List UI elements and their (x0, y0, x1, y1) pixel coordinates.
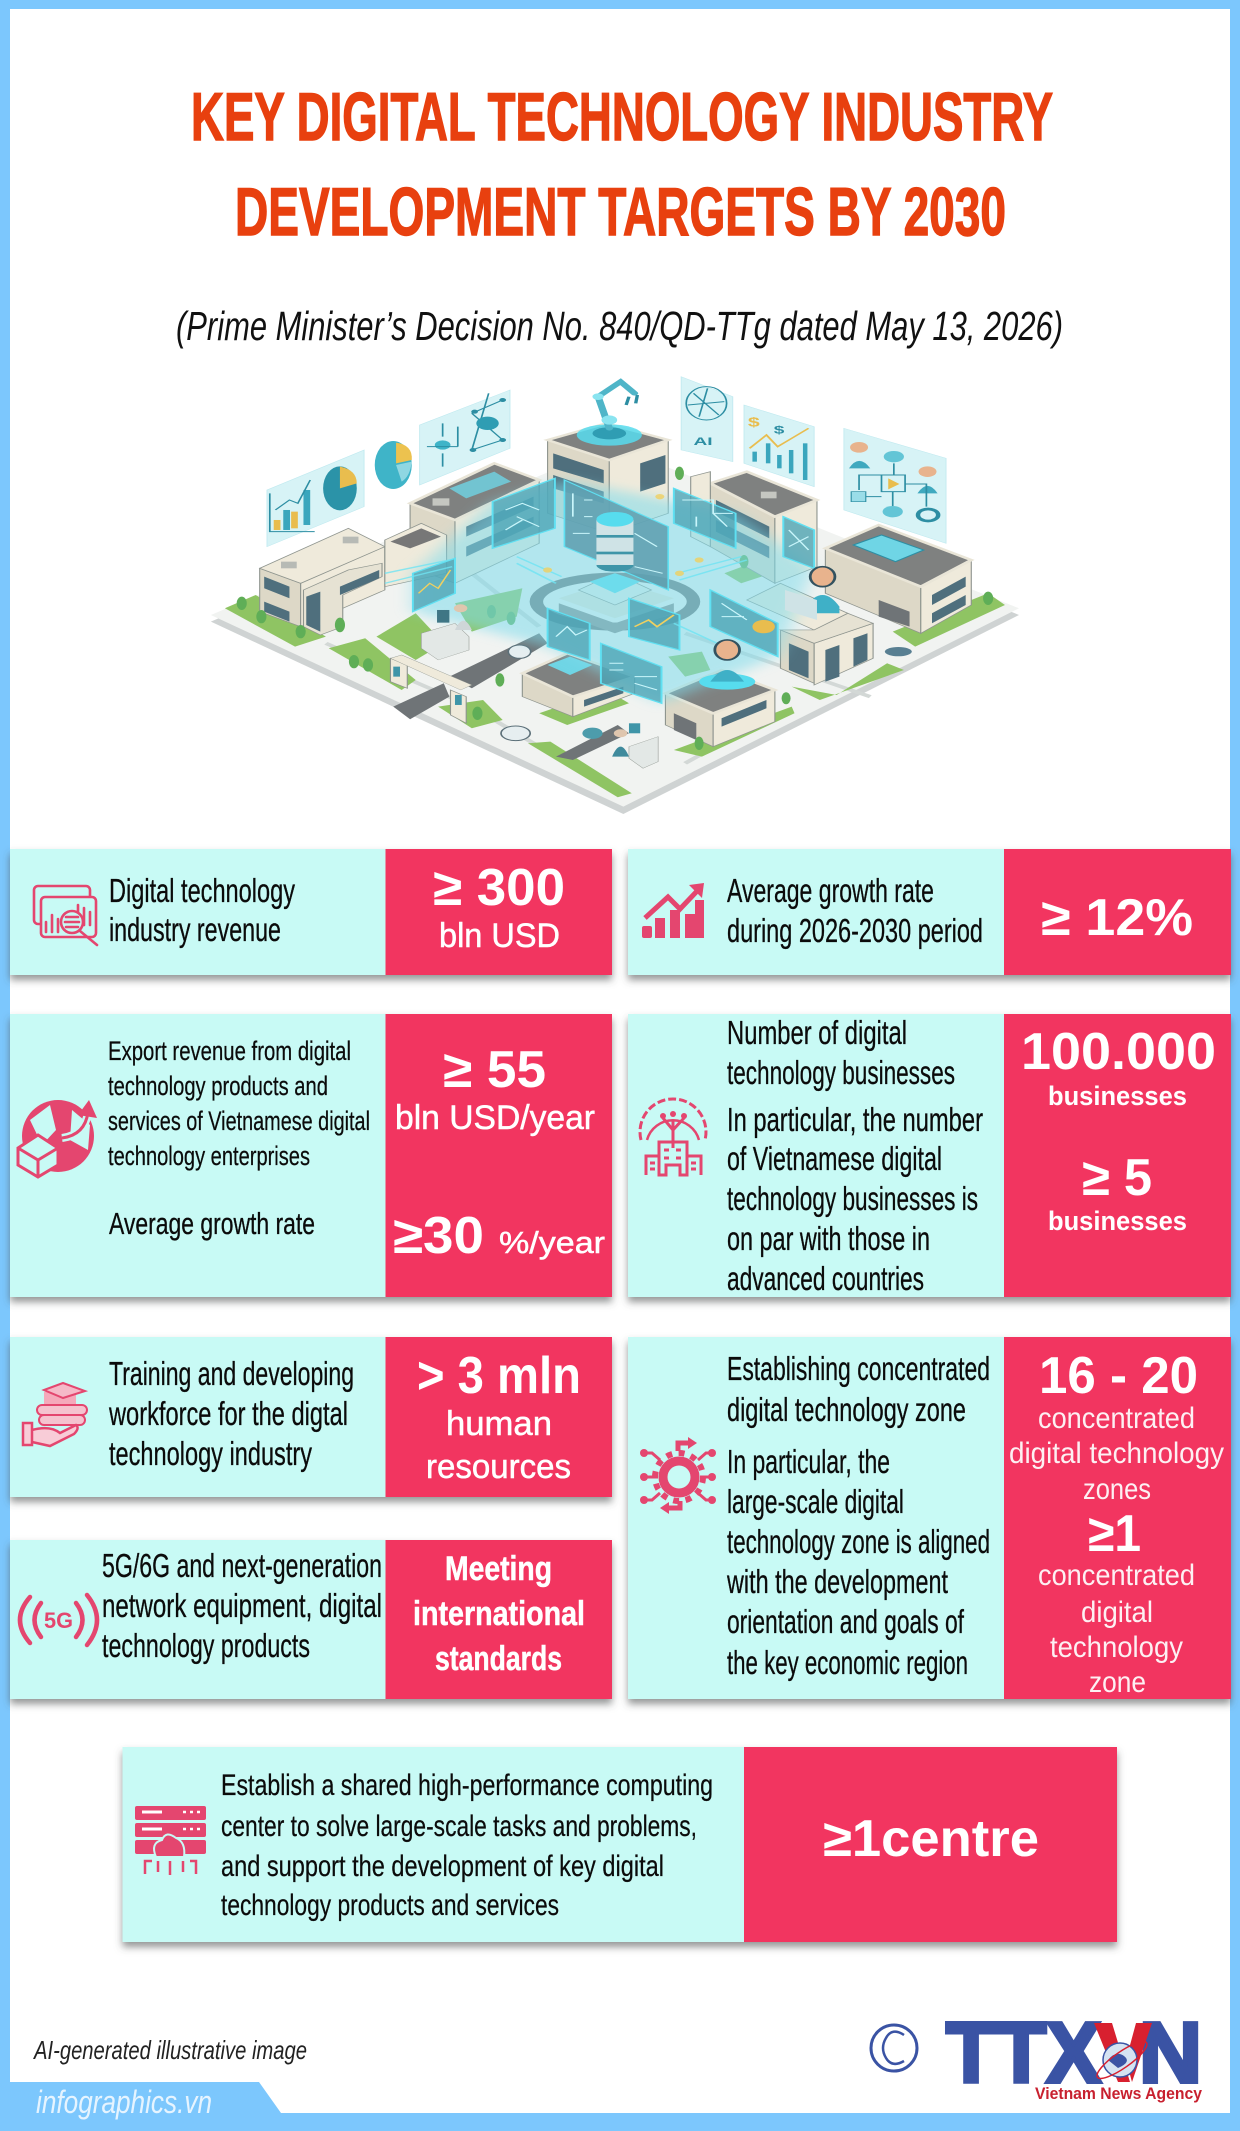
panel: concentrated digital technology zones: 16 - 20 (1039, 1347, 1198, 1405)
panel: digital technology industry revenue (10, 849, 612, 975)
building: right tall (691, 472, 817, 583)
panel: export revenue: services of Vietnamese digital (108, 1106, 370, 1136)
icon: graduation cap, books and hand (23, 1383, 87, 1446)
panel: average growth rate (628, 849, 1231, 975)
building: left (260, 528, 385, 635)
panel: concentrated digital technology zones: technology (1050, 1631, 1183, 1664)
panel: concentrated digital technology zones: zone (1089, 1666, 1146, 1699)
panel: concentrated digital technology zones (628, 1337, 1231, 1699)
panel: export revenue (10, 1014, 612, 1297)
panel: average growth rate: during 2026-2030 period (727, 912, 983, 949)
panel: number of digital technology businesses: ≥ 5 (1082, 1149, 1152, 1207)
panel: export revenue: ≥30 (393, 1207, 484, 1265)
panel: number of digital technology businesses: technology businesses is (727, 1180, 978, 1217)
logo: TTXVN Vietnam News Agency: Vietnam News Agency (1035, 2084, 1202, 2103)
panel: concentrated digital technology zones: Establishing concentrated (727, 1350, 990, 1387)
hologram glow (413, 480, 814, 703)
floating panel: pie (375, 441, 412, 489)
building: front center (665, 670, 775, 747)
image note: AI-generated illustrative image (32, 2035, 307, 2065)
cars (501, 645, 912, 741)
panel: concentrated digital technology zones: digital technology zone (727, 1391, 966, 1428)
floating panel: workflow (844, 428, 946, 543)
floating panel: AI brain: AI (693, 436, 713, 448)
panel: number of digital technology businesses: businesses (1048, 1206, 1187, 1236)
panel: average growth rate: Average growth rate (727, 872, 934, 909)
panel: export revenue: Export revenue from digital (108, 1036, 351, 1066)
panel: 5G/6G equipment: network equipment, digital (102, 1587, 382, 1624)
icon: analytics windows with magnifier (34, 886, 97, 945)
panel: concentrated digital technology zones: digital (1081, 1596, 1153, 1629)
panel: concentrated digital technology zones: zones (1083, 1473, 1151, 1506)
panel: concentrated digital technology zones: digital technology (1009, 1437, 1224, 1470)
database icon (596, 512, 633, 572)
workers (421, 567, 839, 768)
icon: gear and office building (640, 1099, 706, 1175)
logo: TTXVN Vietnam News Agency: N (1139, 2006, 1202, 2101)
building: center tower (548, 423, 668, 533)
panel: number of digital technology businesses: Number of digital (727, 1014, 907, 1051)
panel: export revenue: technology enterprises (108, 1141, 310, 1171)
panel: concentrated digital technology zones: In particular, the (727, 1443, 890, 1480)
floating panel: dollar chart (744, 405, 814, 487)
panel: export revenue: ≥ 55 (443, 1041, 546, 1099)
icon: 5G signal: 5G (44, 1608, 73, 1633)
security gate (390, 655, 472, 723)
panel: concentrated digital technology zones: ≥1 (1088, 1505, 1141, 1563)
copyright symbol (871, 2025, 917, 2071)
panel: export revenue: bln USD/year (395, 1099, 595, 1137)
building: far right (825, 525, 971, 633)
panel: average growth rate: ≥ 12% (1041, 889, 1193, 947)
panel: 5G/6G equipment (10, 1540, 612, 1699)
icon: gear with arrows and nodes (640, 1437, 716, 1514)
panel: number of digital technology businesses: on par with those in (727, 1220, 930, 1257)
panel: number of digital technology businesses: advanced countries (727, 1260, 924, 1297)
panel: concentrated digital technology zones: concentrated (1038, 1559, 1195, 1592)
panel: workforce training: resources (426, 1448, 571, 1486)
trees (237, 467, 993, 750)
title (191, 79, 1053, 250)
panel: 5G/6G equipment: Meeting (445, 1550, 552, 1588)
panel: number of digital technology businesses: businesses (1048, 1081, 1187, 1111)
panel: number of digital technology businesses: technology businesses (727, 1054, 955, 1091)
floating panel: bar chart and pie (267, 450, 364, 547)
building: front left (522, 653, 635, 717)
floating panel: network (420, 390, 510, 485)
panel: workforce training (10, 1337, 612, 1497)
floating panel: AI brain (681, 377, 733, 462)
panel: shared high-performance computing center: ≥1centre (823, 1810, 1039, 1868)
panel: shared high-performance computing center: technology products and services (221, 1889, 559, 1922)
panel: concentrated digital technology zones: concentrated (1038, 1402, 1195, 1435)
logo: TTXVN Vietnam News Agency: TTX (946, 2006, 1101, 2101)
data flow lines (385, 494, 747, 647)
panel: shared high-performance computing center: center to solve large-scale tasks and problems, (221, 1810, 697, 1843)
panel: workforce training: technology industry (109, 1435, 312, 1472)
icon: growth chart (642, 883, 704, 938)
robot arm (577, 382, 642, 446)
panel: shared high-performance computing center (122, 1747, 1117, 1942)
panel: concentrated digital technology zones: the key economic region (727, 1644, 968, 1681)
panel: number of digital technology businesses (628, 1014, 1231, 1297)
panel: number of digital technology businesses: In particular, the number (727, 1101, 983, 1138)
panel: shared high-performance computing center: and support the development of key digital (221, 1850, 664, 1883)
building: left tall (385, 463, 539, 587)
central hub (559, 573, 674, 633)
panel: 5G/6G equipment: international (413, 1595, 585, 1633)
icon: server with cloud and circuits (135, 1806, 206, 1875)
panel: workforce training: > 3 mln (417, 1347, 581, 1405)
panel: export revenue: Average growth rate (109, 1206, 315, 1241)
logo: TTXVN Vietnam News Agency (946, 2006, 1202, 2103)
panel: concentrated digital technology zones: technology zone is aligned (727, 1523, 990, 1560)
panel: digital technology industry revenue: industry revenue (109, 911, 281, 948)
panel: 5G/6G equipment: standards (435, 1640, 562, 1678)
panel: digital technology industry revenue: bln USD (439, 917, 560, 955)
panel: workforce training: Training and developing (109, 1355, 354, 1392)
floating panel: dollar chart: $ (774, 424, 785, 436)
panel: concentrated digital technology zones: orientation and goals of (727, 1603, 965, 1640)
icon: 5G signal (20, 1595, 97, 1645)
panel: workforce training: human (446, 1405, 552, 1443)
panel: 5G/6G equipment: 5G/6G and next-generation (102, 1547, 382, 1584)
panel: digital technology industry revenue: ≥ 300 (433, 859, 565, 917)
panel: 5G/6G equipment: technology products (102, 1627, 310, 1664)
panel: number of digital technology businesses: 100.000 (1021, 1023, 1216, 1081)
panel: shared high-performance computing center: Establish a shared high-performance computing (221, 1769, 713, 1802)
building: front right (747, 583, 873, 685)
holographic screens (413, 478, 814, 703)
illustration: isometric digital technology park (211, 377, 1019, 814)
panel: workforce training: workforce for the digtal (108, 1395, 348, 1432)
floating panel: dollar chart: $ (748, 415, 760, 430)
website label: infographics.vn (36, 2084, 212, 2120)
panel: export revenue: %/year (499, 1225, 605, 1260)
icon: globe with box and arrow (18, 1100, 97, 1177)
panel: number of digital technology businesses: of Vietnamese digital (727, 1140, 942, 1177)
panel: digital technology industry revenue: Digital technology (109, 872, 295, 909)
panel: export revenue: technology products and (108, 1071, 328, 1101)
panel: concentrated digital technology zones: with the development (726, 1563, 948, 1600)
panel: concentrated digital technology zones: large-scale digital (727, 1483, 904, 1520)
